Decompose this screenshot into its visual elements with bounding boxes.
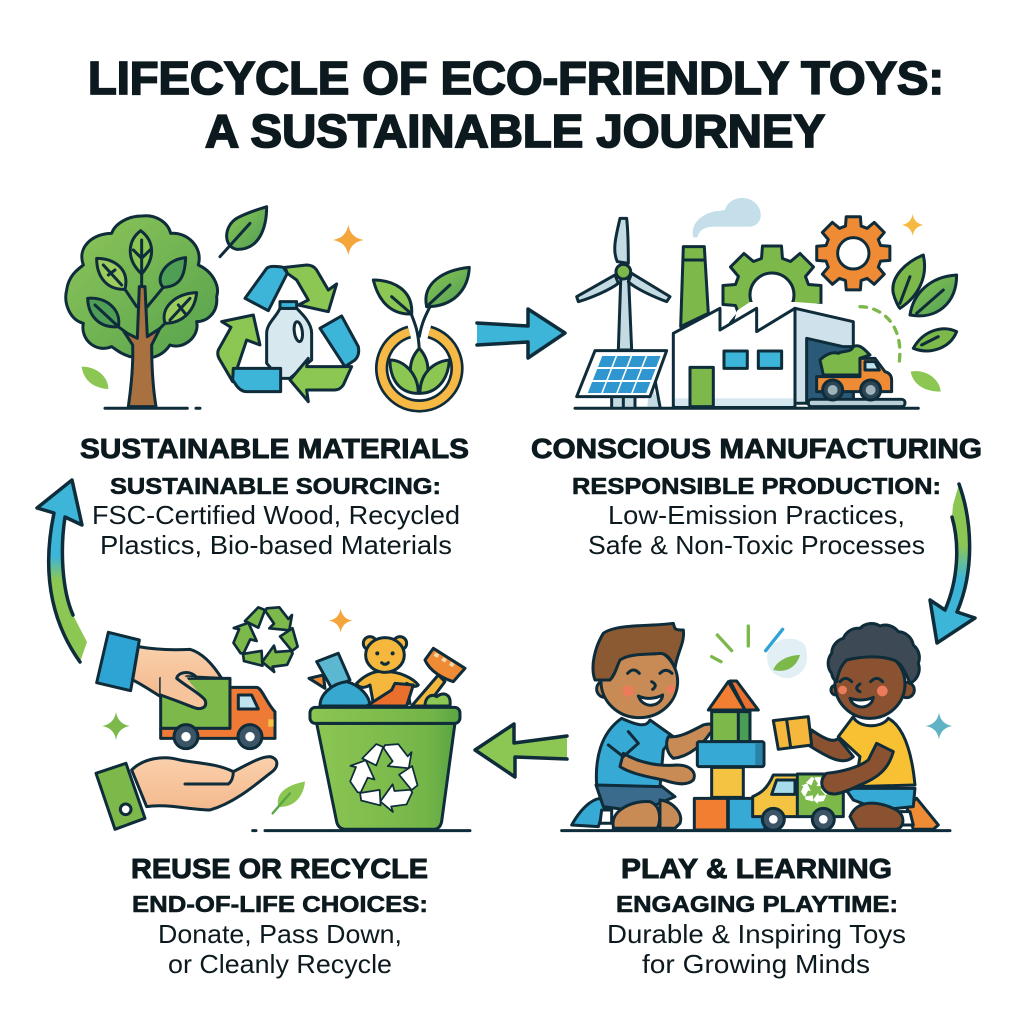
text: recycle description: Donate, Pass Down, (158, 919, 402, 949)
panel: reuse or recycle (96, 607, 470, 979)
heading: reuse or recycle: REUSE OR RECYCLE (131, 853, 428, 884)
text: recycle description (158, 919, 402, 979)
panel: play and learning (562, 623, 952, 979)
icon: sparkle lines and leaf bubble (562, 626, 952, 831)
subheading: responsible production: RESPONSIBLE PRODUCTION: (572, 473, 941, 499)
text: materials description: FSC-Certified Wood, Recycled (92, 500, 460, 530)
title: A SUSTAINABLE JOURNEY (205, 105, 825, 157)
subheading: end-of-life choices: END-OF-LIFE CHOICES: (132, 891, 428, 917)
icon: toy truck (753, 774, 843, 830)
icon: orange gear (817, 214, 924, 290)
text: play description: Durable & Inspiring Toys (607, 919, 906, 949)
icon: boy in yellow shirt (773, 624, 938, 829)
icon: leaves and dashed path (860, 255, 957, 392)
icon: toys in recycling bin (253, 637, 470, 831)
icon: block tower (694, 681, 765, 830)
icon: green gear (723, 246, 827, 350)
subheading: sustainable sourcing: SUSTAINABLE SOURCING: (110, 473, 441, 499)
icon: small recycling symbol (102, 607, 353, 813)
icon: boy in blue shirt (572, 623, 714, 828)
icon: solar panel (577, 351, 667, 407)
subheading: engaging playtime: ENGAGING PLAYTIME: (616, 891, 898, 917)
title (88, 52, 944, 157)
arrow: materials to manufacturing (477, 309, 565, 358)
arrow: play to reuse (475, 724, 567, 777)
icon: seedling in ring (373, 267, 469, 406)
arrow: manufacturing to play (930, 484, 975, 643)
icon: toy truck between hands (96, 632, 277, 829)
heading: play and learning: PLAY & LEARNING (621, 853, 892, 884)
text: materials description (92, 500, 460, 560)
arrow: reuse back to materials (37, 480, 87, 662)
icon: chimney and smoke (681, 198, 761, 327)
text: manufacturing description (588, 500, 925, 560)
heading: sustainable materials: SUSTAINABLE MATERIALS (80, 433, 469, 464)
text: recycle description: or Cleanly Recycle (168, 949, 392, 979)
panel: conscious manufacturing (531, 198, 982, 560)
icon: wind turbine (577, 218, 670, 350)
text: play description (607, 919, 906, 979)
icon: tree (66, 216, 217, 408)
text: play description: for Growing Minds (642, 949, 870, 979)
icon: floating leaf (220, 207, 364, 257)
panel: sustainable materials (66, 207, 469, 560)
icon: truck leaving factory (575, 346, 918, 408)
text: materials description: Plastics, Bio-based Materials (100, 530, 452, 560)
icon: factory (673, 308, 853, 407)
icon: recycling symbol with bottle (218, 265, 359, 402)
text: manufacturing description: Safe & Non-Toxic Processes (588, 530, 925, 560)
text: manufacturing description: Low-Emission Practices, (608, 500, 905, 530)
title: LIFECYCLE OF ECO-FRIENDLY TOYS: (88, 52, 944, 104)
heading: conscious manufacturing: CONSCIOUS MANUFACTURING (531, 433, 982, 464)
